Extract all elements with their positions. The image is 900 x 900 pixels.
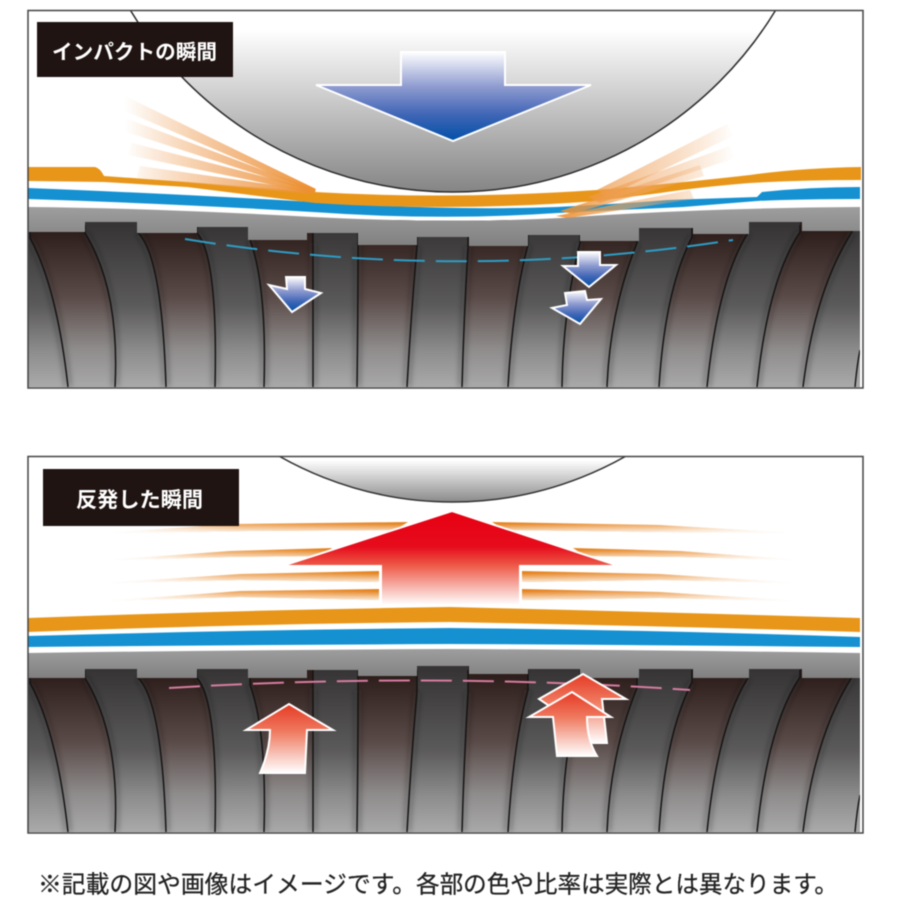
right orange motion streaks — [492, 522, 799, 601]
small red arrow right back — [539, 674, 626, 743]
footnote: 各部の色や比率は実際とは異なります。 — [416, 872, 838, 898]
white layer above tire — [28, 457, 860, 653]
golf ball rebound — [279, 456, 626, 504]
panel frame — [28, 10, 863, 388]
small blue arrow left — [269, 277, 321, 312]
white layer above tire — [28, 11, 860, 221]
left orange motion rays — [118, 96, 316, 194]
small blue arrow right upper — [563, 252, 616, 287]
grey tire band with lug notches — [28, 649, 860, 678]
dashed deformation line blue — [185, 239, 733, 261]
left orange motion streaks — [105, 522, 408, 601]
orange layer — [28, 607, 860, 632]
blue layer — [28, 187, 860, 217]
label: rebound — [43, 469, 239, 526]
large blue down arrow — [316, 52, 591, 141]
label: rebound: 反発した瞬間 — [76, 489, 203, 512]
blue layer — [28, 628, 860, 647]
golf ball impact — [130, 10, 776, 194]
orange layer — [28, 167, 861, 207]
tire lug backing — [28, 221, 860, 270]
large red up arrow — [282, 511, 619, 605]
small blue arrow right lower — [552, 291, 601, 324]
tire body ribs — [28, 220, 860, 387]
dashed deformation line pink — [169, 680, 690, 690]
panel: rebound moment — [26, 455, 864, 834]
label: impact — [37, 22, 233, 77]
label: impact: インパクトの瞬間 — [52, 41, 217, 64]
small red arrow left — [246, 704, 333, 773]
grey tire band with lug notches — [28, 207, 860, 246]
panel frame — [28, 456, 863, 833]
tire lug backing — [28, 660, 860, 705]
panel: impact moment — [28, 0, 863, 388]
small red arrow right front — [529, 692, 611, 756]
right orange motion rays — [556, 124, 735, 218]
footnote: ※記載の図や画像はイメージです。 — [38, 872, 416, 898]
tire body ribs — [28, 665, 860, 832]
